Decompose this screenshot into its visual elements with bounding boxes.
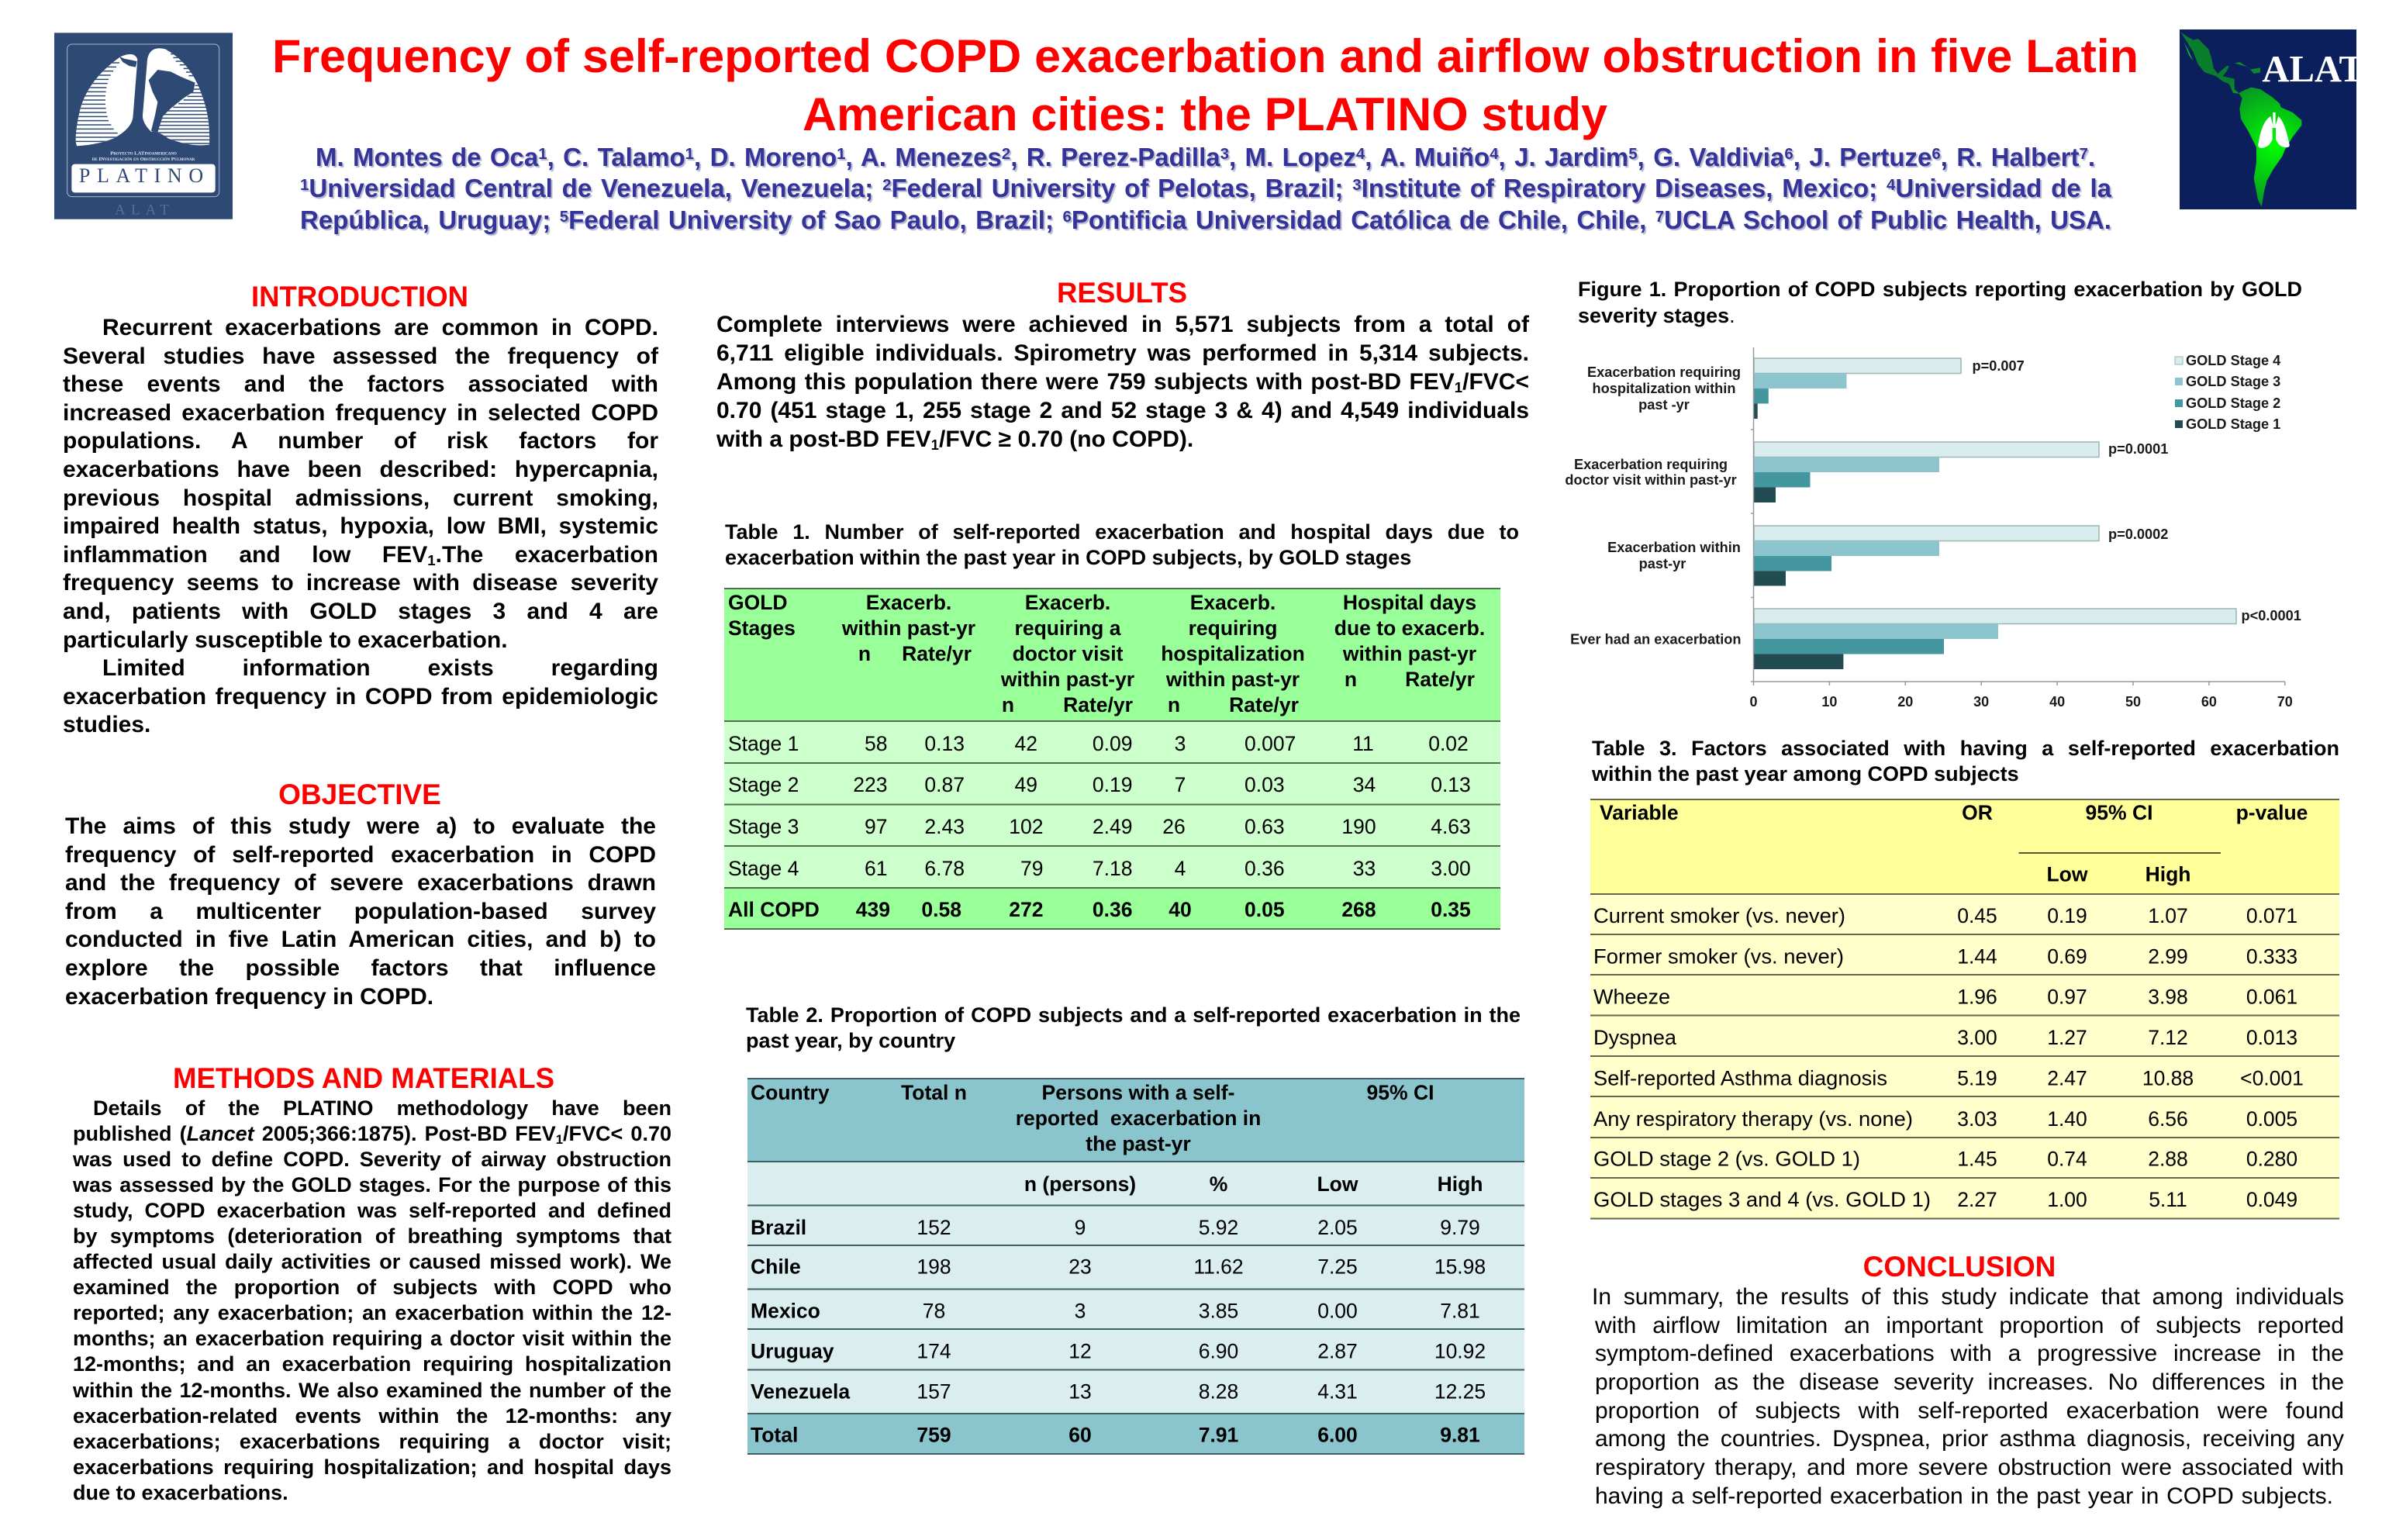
table 1: exacerbations by GOLD stage: 268	[1341, 898, 1376, 921]
chart category labels: Exacerbation requiring	[1587, 364, 1741, 380]
table 1: exacerbations by GOLD stage: 0.007	[1245, 732, 1296, 755]
table 1: exacerbations by GOLD stage: Stage 2	[728, 773, 799, 796]
table 3: factors: 7.12	[2148, 1026, 2188, 1049]
table 1: exacerbations by GOLD stage: 79	[1020, 857, 1044, 880]
chart axes	[1751, 347, 2285, 685]
table 1 header: doctor visit	[1013, 642, 1124, 665]
text: introduction: Several studies have assessed the frequency of	[63, 344, 658, 369]
chart legend: GOLD Stage 1	[2186, 416, 2280, 432]
logo: ALAT map: ALAT	[2262, 48, 2364, 90]
table 2 rows: 9.79	[1440, 1216, 1480, 1239]
table 1: exacerbations by GOLD stage: 0.35	[1431, 898, 1471, 921]
table 3: factors: 3.98	[2148, 985, 2188, 1008]
logo caption: Proyecto LATinoamericano	[110, 151, 177, 157]
table 3: factors: 1.00	[2047, 1188, 2087, 1211]
heading: results: RESULTS	[1057, 277, 1187, 309]
table 3: factors: 3.00	[1957, 1026, 1997, 1049]
table 3: factors: 6.56	[2148, 1107, 2188, 1131]
table 3: factors: 1.96	[1957, 985, 1997, 1008]
table 1 header: requiring a	[1015, 616, 1121, 640]
table 3 header: p-value	[2236, 801, 2308, 824]
chart category labels: past -yr	[1638, 397, 1690, 413]
text: conclusion: having a self-reported exacerbation in the past year in COPD subjects.	[1595, 1483, 2333, 1509]
caption: figure 1	[1578, 278, 2302, 327]
table 1 header: Hospital days	[1343, 591, 1476, 614]
table 2: by country	[747, 1079, 1524, 1454]
table 1 header: n	[1168, 693, 1180, 716]
text: methods and materials	[73, 1096, 671, 1504]
table 2: by country: 7.91	[1199, 1424, 1238, 1447]
table 1: exacerbations by GOLD stage: 49	[1015, 773, 1037, 796]
table 3: factors: 0.049	[2246, 1188, 2297, 1211]
text: methods and materials: study, COPD exacerbation was self-reported and defined	[73, 1199, 671, 1222]
logo: ALAT map	[2180, 29, 2364, 209]
text: introduction: exacerbations have been described: hypercapnia,	[63, 457, 658, 482]
chart axis labels: 70	[2277, 694, 2293, 710]
table 3: factors: 1.44	[1957, 944, 1997, 968]
caption: figure 1: Figure 1. Proportion of COPD subjects reporting exacerbation by GOLD	[1578, 278, 2302, 301]
caption: table 2	[746, 1003, 1521, 1052]
text: methods and materials: months; an exacerbation requiring a doctor visit within the	[73, 1327, 671, 1350]
text: objective: from a multicenter population-based survey	[65, 899, 656, 924]
table 1: exacerbations by GOLD stage: 223	[853, 773, 887, 796]
text: results: Complete interviews were achieved in 5,571 subjects from a total of	[716, 312, 1529, 337]
chart axis labels: 20	[1897, 694, 1913, 710]
chart bars	[1754, 358, 2236, 669]
table 1: exacerbations by GOLD stage: 102	[1009, 815, 1044, 838]
table 1: exacerbations by GOLD stage: 0.02	[1428, 732, 1469, 755]
table 2 rows: 4.31	[1317, 1380, 1358, 1404]
table 3: factors: 10.88	[2142, 1067, 2194, 1090]
table 2 rows: 9	[1075, 1216, 1086, 1239]
table 3: factors: 0.97	[2047, 985, 2087, 1008]
table 2 rows	[917, 1216, 1486, 1404]
title: Frequency of self-reported COPD exacerbation and airflow obstruction in five Latin	[272, 30, 2139, 82]
logo: PLATINO: ALAT	[115, 202, 174, 219]
table 1: exacerbations by GOLD stage: 272	[1009, 898, 1044, 921]
text: objective: The aims of this study were a) to evaluate the	[65, 813, 656, 839]
table 1: exacerbations by GOLD stage: 0.03	[1245, 773, 1285, 796]
text: methods and materials: exacerbation-related events within the 12-months: any	[73, 1404, 671, 1428]
table 1 header: Exacerb.	[1190, 591, 1276, 614]
table 2: by country: Total	[751, 1424, 798, 1447]
table 2: by country: 6.00	[1317, 1424, 1358, 1447]
table 1: exacerbations by GOLD stage: 0.63	[1245, 815, 1285, 838]
chart axis labels: 50	[2125, 694, 2141, 710]
table 3: factors: 2.88	[2148, 1148, 2188, 1171]
table 1 header: n	[1345, 668, 1357, 691]
table 3: factors: GOLD stages 3 and 4 (vs. GOLD 1)	[1593, 1188, 1931, 1211]
table 3: factors: 1.27	[2047, 1026, 2087, 1049]
table 2 rows: 0.00	[1317, 1300, 1358, 1323]
text: introduction: impaired health status, hypoxia, low BMI, systemic	[63, 513, 658, 539]
chart axis labels: 0	[1749, 694, 1758, 710]
table 1 header: n	[858, 642, 871, 665]
table 2 rows: 3	[1075, 1300, 1086, 1323]
table 1: exacerbations by GOLD stage: 3.00	[1431, 857, 1471, 880]
chart category labels: past-yr	[1639, 556, 1686, 571]
chart axis labels: 30	[1973, 694, 1989, 710]
table 2 rows: 152	[917, 1216, 951, 1239]
table 1: exacerbations by GOLD stage: 0.09	[1093, 732, 1132, 755]
table 3: factors: 0.071	[2246, 904, 2297, 927]
caption: table 1	[725, 520, 1519, 569]
heading: introduction: INTRODUCTION	[251, 281, 468, 312]
authors and affiliations: 1Universidad Central de Venezuela, Venezuela; 2Federal University of Pelotas, Brazil; 3Institute of Respiratory Diseases, Mexico; 4Universidad de la	[300, 174, 2111, 202]
text: methods and materials: was used to define COPD. Severity of airway obstruction	[73, 1148, 671, 1171]
icon: lungs	[2258, 112, 2290, 148]
title: American cities: the PLATINO study	[803, 88, 1608, 140]
table 1: exacerbations by GOLD stage: 0.36	[1093, 898, 1132, 921]
table 3: factors	[1590, 799, 2339, 1219]
authors and affiliations	[300, 143, 2114, 236]
table 2 header: High	[1438, 1172, 1483, 1196]
table 3: factors: 3.03	[1957, 1107, 1997, 1131]
table 1: exacerbations by GOLD stage: 6.78	[924, 857, 965, 880]
table 3: factors: Dyspnea	[1593, 1026, 1676, 1049]
table 3 header: 95% CI	[2086, 801, 2152, 824]
logo: PLATINO	[54, 33, 233, 219]
text: methods and materials: 12-months; and an exacerbation requiring hospitalization	[73, 1352, 671, 1376]
table 1 header: Exacerb.	[1025, 591, 1110, 614]
chart axis labels: 10	[1821, 694, 1837, 710]
table 3: factors: 2.99	[2148, 944, 2188, 968]
table 2 rows: 11.62	[1193, 1255, 1244, 1278]
table 3: factors: GOLD stage 2 (vs. GOLD 1)	[1593, 1148, 1860, 1171]
table 3: factors: Self-reported Asthma diagnosis	[1593, 1067, 1887, 1090]
text: conclusion: with airflow limitation an important proportion of subjects reported	[1595, 1313, 2344, 1338]
table 3: factors: Former smoker (vs. never)	[1593, 944, 1844, 968]
table 2: by country: 60	[1068, 1424, 1092, 1447]
heading: objective: OBJECTIVE	[278, 779, 441, 810]
table 1 header: Stages	[728, 616, 796, 640]
text: methods and materials: published (Lancet 2005;366:1875). Post-BD FEV1/FVC< 0.70	[73, 1122, 671, 1147]
table 3: factors: 0.19	[2047, 904, 2087, 927]
table 3: factors: 0.333	[2246, 944, 2297, 968]
text: methods and materials: exacerbations; exacerbations requiring a doctor visit;	[73, 1430, 671, 1453]
caption: table 1: exacerbation within the past year in COPD subjects, by GOLD stages	[725, 546, 1411, 569]
table 1 header: Rate/yr	[902, 642, 972, 665]
table 1: exacerbations by GOLD stage: 33	[1353, 857, 1376, 880]
table 1: exacerbations by GOLD stage: 2.43	[924, 815, 965, 838]
table 2 rows: 157	[917, 1380, 951, 1404]
text: objective: conducted in five Latin American cities, and b) to	[65, 927, 656, 952]
text: introduction: frequency seems to increase with disease severity	[63, 570, 658, 596]
text: objective: and the frequency of severe exacerbations drawn	[65, 870, 656, 896]
logo wordmark: PLATINO	[79, 164, 210, 187]
title	[272, 30, 2139, 140]
table 3: factors: 0.280	[2246, 1148, 2297, 1171]
caption: figure 1: severity stages.	[1578, 304, 1735, 327]
table 2 rows: 5.92	[1199, 1216, 1238, 1239]
table 3 header: Low	[2047, 862, 2088, 886]
table 2 rows: 10.92	[1434, 1340, 1486, 1363]
icon: right lung with South America	[143, 48, 209, 146]
text: introduction: populations. A number of risk factors for	[63, 428, 658, 454]
text: methods and materials: by symptoms (deterioration of breathing symptoms that	[73, 1224, 671, 1248]
chart p-values: p=0.0002	[2108, 527, 2168, 542]
text: introduction: previous hospital admissions, current smoking,	[63, 485, 658, 511]
table 1: exacerbations by GOLD stage: 61	[865, 857, 887, 880]
text: introduction: Limited information exists regarding	[102, 655, 658, 681]
table 2 header: Country	[751, 1081, 830, 1104]
text: conclusion: proportion as the disease severity increases. No differences in the	[1595, 1369, 2344, 1395]
chart p-values: p<0.0001	[2241, 608, 2301, 623]
table 1: exacerbations by GOLD stage: Stage 3	[728, 815, 799, 838]
table 2 header	[751, 1081, 1483, 1196]
text: results	[716, 312, 1529, 453]
table 3: factors: 0.74	[2047, 1148, 2087, 1171]
caption: table 2: past year, by country	[746, 1029, 955, 1052]
table 1 header: Rate/yr	[1063, 693, 1133, 716]
authors and affiliations: República, Uruguay; 5Federal University of Sao Paulo, Brazil; 6Pontificia Universidad Católica de Chile, Chile, 7UCLA School of Public Health, USA.	[300, 205, 2111, 234]
table 2 rows: 15.98	[1434, 1255, 1486, 1278]
table 1: exacerbations by GOLD stage	[724, 589, 1500, 929]
figure 1: bar chart	[1565, 347, 2301, 710]
table 2 header: Low	[1317, 1172, 1358, 1196]
chart category labels: Exacerbation requiring	[1574, 457, 1728, 472]
chart category labels: Exacerbation within	[1607, 540, 1741, 555]
table 2 header: 95% CI	[1367, 1081, 1434, 1104]
table 3: factors: 2.47	[2047, 1067, 2087, 1090]
chart category labels: doctor visit within past-yr	[1565, 472, 1737, 488]
text: methods and materials: affected usual daily activities or caused missed work). We	[73, 1250, 671, 1273]
table 2 rows: 6.90	[1199, 1340, 1238, 1363]
table 3 header: High	[2146, 862, 2190, 886]
table 2 rows: 78	[923, 1300, 945, 1323]
chart category labels: Ever had an exacerbation	[1570, 631, 1742, 647]
table 1: exacerbations by GOLD stage: 0.58	[921, 898, 961, 921]
table 2 rows: 7.25	[1317, 1255, 1358, 1278]
table 2: by country: Mexico	[751, 1300, 820, 1323]
chart p-values: p=0.007	[1973, 358, 2025, 374]
table 1: exacerbations by GOLD stage: 34	[1353, 773, 1376, 796]
table 1: exacerbations by GOLD stage: 97	[865, 815, 887, 838]
chart legend: GOLD Stage 2	[2186, 395, 2280, 411]
table 3: factors: 5.19	[1957, 1067, 1997, 1090]
text: methods and materials: Details of the PLATINO methodology have been	[93, 1096, 671, 1120]
table 3: factors: Any respiratory therapy (vs. none)	[1593, 1107, 1913, 1131]
text: introduction	[63, 315, 659, 737]
table 2: by country: 9.81	[1440, 1424, 1480, 1447]
table 2 rows: 174	[917, 1340, 951, 1363]
text: methods and materials: was assessed by the GOLD stages. For the purpose of this	[73, 1173, 671, 1196]
heading: methods and materials: METHODS AND MATERIALS	[173, 1062, 554, 1094]
table 2 header: reported exacerbation in	[1016, 1107, 1261, 1130]
table 3 rows: Current smoker (vs. never)	[1593, 904, 1845, 927]
table 3: factors: 1.07	[2148, 904, 2188, 927]
chart legend	[2175, 353, 2281, 432]
table 1 header: within past-yr	[1165, 668, 1300, 691]
chart axis labels: 40	[2049, 694, 2065, 710]
table 3: factors: 0.061	[2246, 985, 2297, 1008]
table 1: exacerbations by GOLD stage: 4.63	[1431, 815, 1471, 838]
table 3: factors: Wheeze	[1593, 985, 1670, 1008]
caption: table 1: Table 1. Number of self-reported exacerbation and hospital days due to	[725, 520, 1519, 544]
text: methods and materials: reported; any exacerbation; an exacerbation within the 12-	[73, 1301, 671, 1324]
text: conclusion: among the countries. Dyspnea, prior asthma diagnosis, receiving any	[1595, 1426, 2344, 1452]
text: introduction: studies.	[63, 712, 150, 737]
text: introduction: exacerbation frequency in COPD from epidemiologic	[63, 684, 658, 710]
table 1: exacerbations by GOLD stage: All COPD	[728, 898, 820, 921]
text: objective	[65, 813, 656, 1010]
table 2: by country: Chile	[751, 1255, 801, 1278]
table 3 header: Variable	[1600, 801, 1679, 824]
table 1 header: Exacerb.	[866, 591, 951, 614]
heading: conclusion: CONCLUSION	[1863, 1251, 2056, 1283]
text: results: Among this population there were 759 subjects with post-BD FEV1/FVC<	[716, 369, 1529, 395]
table 1: exacerbations by GOLD stage: Stage 4	[728, 857, 799, 880]
table 1 rows: Stage 1	[728, 732, 799, 755]
text: conclusion: respiratory therapy, and more severe obstruction were associated with	[1595, 1455, 2344, 1480]
text: introduction: increased exacerbation frequency in selected COPD	[63, 400, 658, 426]
table 2: by country: Brazil	[751, 1216, 806, 1239]
table 1: exacerbations by GOLD stage: 7.18	[1093, 857, 1132, 880]
table 3: factors: 0.013	[2246, 1026, 2297, 1049]
text: methods and materials: examined the proportion of subjects with COPD who	[73, 1276, 671, 1299]
table 1: exacerbations by GOLD stage: 439	[856, 898, 890, 921]
text: introduction: inflammation and low FEV1.The exacerbation	[63, 542, 658, 568]
text: conclusion: proportion of subjects with self-reported exacerbation were found	[1595, 1398, 2344, 1424]
table 1: exacerbations by GOLD stage: 40	[1169, 898, 1192, 921]
table 2 rows: 2.05	[1317, 1216, 1358, 1239]
text: introduction: Recurrent exacerbations are common in COPD.	[102, 315, 658, 340]
logo: PLATINO: de INvestigación en Obstrucción Pulmonar	[92, 157, 195, 162]
table 1: exacerbations by GOLD stage: 58	[865, 732, 887, 755]
text: conclusion: In summary, the results of this study indicate that among individuals	[1592, 1284, 2344, 1310]
text: introduction: these events and the factors associated with	[63, 371, 658, 397]
table 2 header: the past-yr	[1086, 1132, 1191, 1155]
table 1: exacerbations by GOLD stage: 190	[1341, 815, 1376, 838]
table 1 header: within past-yr	[841, 616, 975, 640]
table 1 header: Rate/yr	[1229, 693, 1299, 716]
table 1 header: requiring	[1189, 616, 1277, 640]
table 2 header: Total n	[901, 1081, 967, 1104]
table 1 header: within past-yr	[1342, 642, 1476, 665]
table 3: factors: 0.45	[1957, 904, 1997, 927]
text: results: 6,711 eligible individuals. Spirometry was performed in 5,314 subjects.	[716, 340, 1529, 366]
table 2 rows: 7.81	[1440, 1300, 1480, 1323]
table 2: by country: Venezuela	[751, 1380, 850, 1404]
table 2 rows: 8.28	[1199, 1380, 1238, 1404]
caption: table 3: within the past year among COPD subjects	[1592, 762, 2019, 786]
table 1: exacerbations by GOLD stage: 7	[1175, 773, 1186, 796]
chart axis labels	[1749, 694, 2293, 710]
table 1: exacerbations by GOLD stage: 11	[1352, 732, 1374, 755]
authors and affiliations: M. Montes de Oca1, C. Talamo1, D. Moreno1, A. Menezes2, R. Perez-Padilla3, M. Lopez4, A. Muiño4, J. Jardim5, G. Valdivia6, J. Pertuze6, R. Halbert7.	[316, 143, 2095, 171]
table 1: exacerbations by GOLD stage: 4	[1175, 857, 1186, 880]
text: objective: frequency of self-reported exacerbation in COPD	[65, 842, 656, 868]
table 1: exacerbations by GOLD stage: 0.13	[1431, 773, 1471, 796]
table 3: factors: <0.001	[2240, 1067, 2304, 1090]
table 1: exacerbations by GOLD stage: 0.05	[1245, 898, 1285, 921]
caption: table 2: Table 2. Proportion of COPD subjects and a self-reported exacerbation in the	[746, 1003, 1521, 1027]
table 1 header: hospitalization	[1161, 642, 1305, 665]
table 1 header	[728, 591, 1485, 716]
table 1 header: within past-yr	[1000, 668, 1134, 691]
table 3 header	[1600, 801, 2308, 886]
table 3: factors: 0.005	[2246, 1107, 2297, 1131]
chart legend: GOLD Stage 3	[2186, 374, 2280, 389]
table 2 header: n (persons)	[1024, 1172, 1136, 1196]
table 1 header: n	[1002, 693, 1014, 716]
text: conclusion	[1592, 1284, 2344, 1509]
table 2 rows: 12.25	[1434, 1380, 1486, 1404]
table 1: exacerbations by GOLD stage: 2.49	[1093, 815, 1132, 838]
text: results: with a post-BD FEV1/FVC ≥ 0.70 (no COPD).	[716, 426, 1193, 453]
table 2 rows: 198	[917, 1255, 951, 1278]
text: methods and materials: within the 12-months. We also examined the number of the	[73, 1379, 671, 1402]
table 2 rows: 2.87	[1317, 1340, 1358, 1363]
table 3: factors: 0.69	[2047, 944, 2087, 968]
text: methods and materials: exacerbations requiring hospitalization; and hospital days	[73, 1455, 671, 1479]
table 3: factors: 5.11	[2149, 1188, 2187, 1211]
table 1: exacerbations by GOLD stage: 0.87	[924, 773, 965, 796]
chart legend: GOLD Stage 4	[2186, 353, 2281, 368]
table 1: exacerbations by GOLD stage: 0.19	[1093, 773, 1132, 796]
table 3: factors: 1.40	[2047, 1107, 2087, 1131]
caption: table 3	[1591, 737, 2339, 786]
text: objective: exacerbation frequency in COPD.	[65, 984, 433, 1010]
table 1: exacerbations by GOLD stage: 26	[1162, 815, 1186, 838]
table 2 rows: 13	[1068, 1380, 1092, 1404]
table 2 rows: 12	[1068, 1340, 1092, 1363]
table 2 header: %	[1210, 1172, 1227, 1196]
table 1 header: due to exacerb.	[1334, 616, 1485, 640]
chart category labels	[1565, 364, 1742, 647]
caption: table 3: Table 3. Factors associated with having a self-reported exacerbation	[1592, 737, 2339, 760]
table 1: exacerbations by GOLD stage: 0.13	[924, 732, 965, 755]
table 1: exacerbations by GOLD stage: 3	[1175, 732, 1186, 755]
text: introduction: and, patients with GOLD stages 3 and 4 are	[63, 599, 658, 624]
table 1 header: GOLD	[728, 591, 788, 614]
chart p-values	[1973, 358, 2301, 623]
table 3: factors: 2.27	[1957, 1188, 1997, 1211]
text: results: 0.70 (451 stage 1, 255 stage 2 and 52 stage 3 & 4) and 4,549 individuals	[716, 398, 1529, 423]
table 1 header: Rate/yr	[1405, 668, 1475, 691]
table 1: exacerbations by GOLD stage: 42	[1015, 732, 1037, 755]
table 1: exacerbations by GOLD stage: 0.36	[1245, 857, 1285, 880]
table 3 header: OR	[1962, 801, 1993, 824]
text: objective: explore the possible factors that influence	[65, 955, 656, 981]
icon: left lung	[76, 54, 138, 146]
text: methods and materials: due to exacerbations.	[73, 1481, 288, 1504]
table 3: factors: 1.45	[1957, 1148, 1997, 1171]
chart axis labels: 60	[2201, 694, 2217, 710]
icon: Latin America map	[2181, 33, 2301, 207]
chart p-values: p=0.0001	[2108, 441, 2168, 457]
table 2 rows: 3.85	[1199, 1300, 1238, 1323]
text: introduction: particularly susceptible to exacerbation.	[63, 627, 508, 653]
chart category labels: hospitalization within	[1593, 381, 1735, 396]
table 2 header: Persons with a self-	[1042, 1081, 1234, 1104]
table 2: by country: Uruguay	[751, 1340, 834, 1363]
table 2: by country: 759	[917, 1424, 951, 1447]
text: conclusion: symptom-defined exacerbations with a progressive increase in the	[1595, 1341, 2344, 1366]
table 2 rows: 23	[1068, 1255, 1092, 1278]
